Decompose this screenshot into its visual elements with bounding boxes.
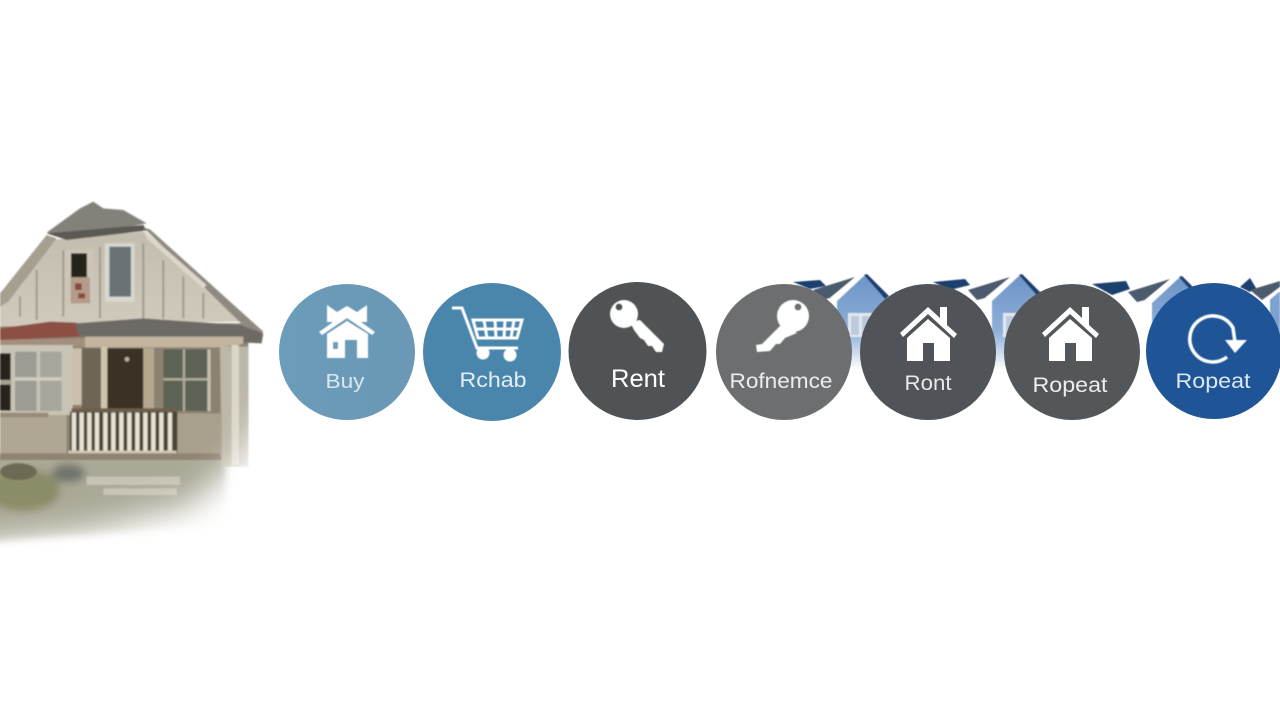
icon: key: [610, 300, 664, 352]
illustration: weathered house: [0, 202, 263, 543]
label: Rent: Rent: [611, 365, 665, 393]
step 4: Refinance: [716, 284, 852, 420]
label: Repeat: Ropeat: [1032, 374, 1108, 397]
house: porch railing: [70, 412, 177, 455]
house: ground and shrubs: [0, 453, 227, 543]
house: left porch window: [0, 345, 73, 415]
step 2: Rehab: [423, 283, 561, 421]
step 1: Buy: [279, 284, 415, 420]
label: Rehab: Rchab: [460, 369, 526, 392]
step 6: Repeat: [1004, 284, 1140, 420]
house: upper roof: [47, 202, 147, 235]
icon: house: [900, 307, 957, 361]
house: shrubs and steps: [0, 463, 180, 495]
row of blue houses behind the circles: [793, 274, 1280, 372]
roof accents: [793, 278, 1256, 295]
house: porch roof: [0, 322, 80, 340]
icon: house: [1042, 307, 1099, 361]
label: Rent: Ront: [904, 372, 952, 395]
step 3: Rent: [568, 282, 706, 420]
label: Buy: Buy: [326, 371, 364, 393]
icon: circular arrow: [1190, 316, 1247, 362]
step 7: Repeat: [1146, 283, 1280, 419]
icon: shopping cart: [452, 308, 522, 362]
label: Repeat: Ropeat: [1176, 370, 1251, 393]
label: Refinance: Rofnemce: [730, 370, 832, 393]
house: right porch window: [163, 349, 210, 411]
step 5: Rent: [860, 284, 996, 420]
house: upper windows: [65, 250, 93, 307]
icon: key: [756, 300, 809, 352]
house: lower walls: [220, 347, 248, 467]
infographic canvas: [0, 201, 1280, 545]
house: wall base: [0, 323, 248, 460]
house: attic gable wall: [0, 232, 240, 327]
icon: house: [319, 305, 375, 358]
